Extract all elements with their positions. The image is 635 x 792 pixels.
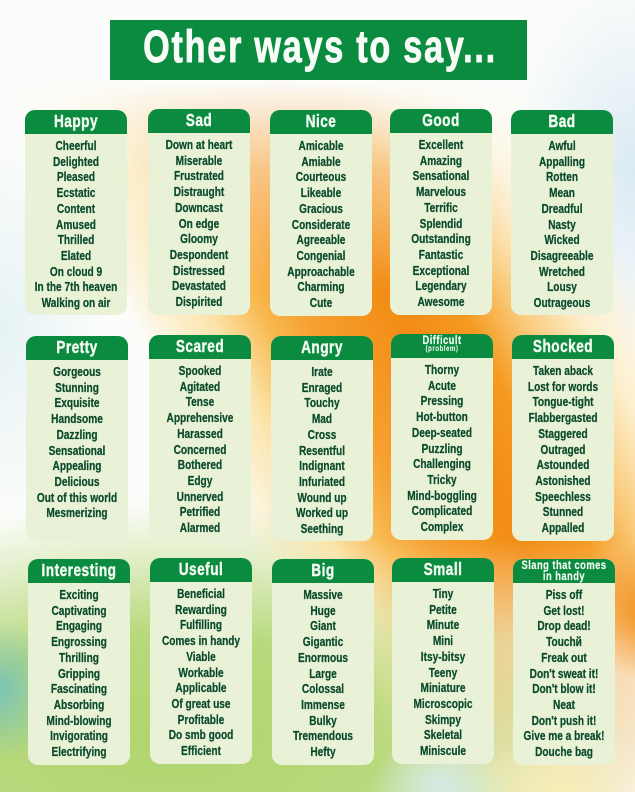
word list: Shocked: Stunned [543, 504, 583, 519]
heading: Good: Good [422, 110, 460, 130]
word list: Sad: On edge [179, 216, 219, 231]
word list: Bad: Lousy [547, 279, 577, 294]
word list: Sad: Miserable [176, 153, 222, 168]
word list: Good: Outstanding [411, 231, 471, 246]
heading: Useful [150, 558, 252, 582]
word list: Difficult: Thorny [425, 362, 459, 377]
word list: Nice: Agreeable [297, 232, 345, 247]
word list: Slang: Neat [553, 697, 575, 712]
word list: Sad: Despondent [170, 247, 228, 262]
word list: Interesting: Captivating [51, 603, 107, 618]
word list: Useful: Workable [178, 665, 224, 680]
heading: Difficult (problem): (problem) [425, 344, 458, 353]
word list: Happy: Walking on air [42, 295, 110, 310]
word list: Interesting [46, 587, 112, 759]
word list: Small: Miniature [421, 680, 465, 695]
heading: Small: Small [424, 559, 462, 579]
word list: Interesting: Thrilling [59, 650, 99, 665]
word list: Slang: Get lost! [543, 603, 585, 618]
word list: Interesting: Absorbing [54, 697, 104, 712]
panel: Slang that comes in handy [513, 559, 615, 765]
word list: Small: Tiny [433, 586, 453, 601]
heading: Nice [270, 110, 372, 134]
word list: Useful: Comes in handy [162, 633, 240, 648]
word list: Nice: Considerate [292, 217, 350, 232]
heading: Bad: Bad [548, 111, 576, 131]
heading: Angry [271, 336, 373, 360]
word list: Shocked: Staggered [538, 426, 588, 441]
word list: Interesting: Engrossing [51, 634, 107, 649]
word list: Small [413, 586, 472, 758]
word list: Difficult: Complex [421, 519, 463, 534]
heading: Difficult (problem) [391, 334, 493, 358]
word list: Scared: Harassed [177, 426, 223, 441]
word list: Good: Fantastic [419, 247, 463, 262]
word list: Nice: Charming [297, 279, 345, 294]
word list: Interesting: Exciting [59, 587, 99, 602]
panel: Difficult [391, 334, 493, 540]
word list: Pretty: Sensational [49, 443, 105, 458]
word list: Difficult: Mind-boggling [407, 488, 477, 503]
word list: Scared: Agitated [180, 379, 220, 394]
panel: Small [392, 558, 494, 764]
word list: Happy [35, 138, 117, 310]
word list: Slang: Douche bag [535, 744, 593, 759]
word list: Useful: Efficient [181, 743, 221, 758]
heading: Good [390, 109, 492, 133]
word list: Nice: Amiable [301, 154, 341, 169]
word list: Angry: Irate [311, 364, 333, 379]
word list: Bad: Wretched [539, 264, 585, 279]
word list: Pretty: Gorgeous [53, 364, 101, 379]
word list: Happy: Cheerful [55, 138, 97, 153]
word list: Useful: Rewarding [175, 602, 227, 617]
word list: Slang: Drop dead! [537, 618, 591, 633]
word list: Shocked: Taken aback [533, 363, 593, 378]
word list: Difficult: Tricky [427, 472, 457, 487]
word list: Difficult: Pressing [421, 393, 463, 408]
word list: Difficult: Complicated [412, 503, 472, 518]
word list: Big: Gigantic [303, 634, 343, 649]
word list: Small: Itsy-bitsy [421, 649, 465, 664]
word list: Sad: Frustrated [174, 168, 224, 183]
heading: Interesting: Interesting [42, 560, 116, 580]
word list: Pretty: Out of this world [37, 490, 117, 505]
word list: Slang: Don't push it! [532, 713, 596, 728]
word list: Bad: Awful [548, 138, 576, 153]
panel: Useful [150, 558, 252, 764]
word list: Nice: Gracious [299, 201, 343, 216]
panel: Good [390, 109, 492, 315]
word list: Slang [524, 587, 604, 759]
heading: Shocked: Shocked [533, 336, 593, 356]
heading: Happy: Happy [54, 111, 98, 131]
word list: Big: Massive [303, 587, 343, 602]
word list: Interesting: Engaging [56, 618, 102, 633]
word list: Bad: Appalling [539, 154, 585, 169]
word list: Pretty: Handsome [51, 411, 103, 426]
word list: Nice: Cute [310, 295, 332, 310]
word list: Good: Sensational [413, 168, 469, 183]
panel: Nice [270, 110, 372, 316]
word list: Happy: Elated [61, 248, 91, 263]
word list: Difficult [407, 362, 477, 534]
word list: Shocked [528, 363, 598, 535]
panel: Happy [25, 110, 127, 315]
heading: Interesting [28, 559, 130, 583]
word list: Pretty: Appealing [53, 458, 101, 473]
word list: Sad: Distraught [174, 184, 224, 199]
heading: Big [272, 559, 374, 583]
word list: Sad: Distressed [173, 263, 225, 278]
word list: Small: Microscopic [413, 696, 472, 711]
word list: Sad: Downcast [175, 200, 223, 215]
word list: Useful: Of great use [171, 696, 230, 711]
word list: Shocked: Lost for words [528, 379, 598, 394]
word list: Slang: Touchй [546, 634, 582, 649]
word list: Scared: Edgy [188, 473, 212, 488]
heading: Nice: Nice [306, 111, 336, 131]
word list: Interesting: Electrifying [51, 744, 107, 759]
word list: Pretty [37, 364, 117, 520]
word list: Scared: Alarmed [180, 520, 220, 535]
word list: Slang: Freak out [541, 650, 587, 665]
word list: Happy: Amused [56, 217, 96, 232]
word list: Shocked: Speechless [535, 489, 591, 504]
word list: Sad: Dispirited [176, 294, 222, 309]
panel: Shocked [512, 335, 614, 541]
word list: Good [411, 137, 471, 309]
word list: Difficult: Acute [428, 378, 456, 393]
word list: Bad: Nasty [548, 217, 576, 232]
panel: Interesting [28, 559, 130, 765]
word list: Nice: Congenial [297, 248, 345, 263]
word list: Good: Exceptional [413, 263, 469, 278]
word list: Good: Splendid [420, 216, 462, 231]
word list: Bad: Wicked [544, 232, 580, 247]
word list: Angry: Mad [312, 411, 332, 426]
word list: Angry: Enraged [302, 380, 342, 395]
word list: Useful: Profitable [178, 712, 224, 727]
word list: Happy: Content [57, 201, 95, 216]
panel: Angry [271, 336, 373, 541]
word list: Angry: Infuriated [299, 474, 345, 489]
word list: Angry: Touchy [304, 395, 340, 410]
word list: Interesting: Mind-blowing [46, 713, 112, 728]
word list: Interesting: Fascinating [51, 681, 107, 696]
word list: Sad [166, 137, 232, 309]
word list: Good: Excellent [419, 137, 463, 152]
word list: Good: Awesome [417, 294, 465, 309]
word list: Big: Giant [310, 618, 336, 633]
word list: Big: Hefty [310, 744, 336, 759]
word list: Big: Immense [301, 697, 345, 712]
word list: Angry: Resentful [299, 443, 345, 458]
heading: Bad [511, 110, 613, 134]
word list: Scared: Unnerved [177, 489, 223, 504]
heading: Scared [149, 335, 251, 359]
word list: Interesting: Invigorating [50, 728, 108, 743]
word list: Bad: Disagreeable [531, 248, 593, 263]
word list: Pretty: Stunning [55, 380, 99, 395]
word list: Shocked: Appalled [542, 520, 584, 535]
word list: Good: Legendary [415, 278, 467, 293]
word list: Small: Petite [429, 602, 457, 617]
word list: Shocked: Flabbergasted [528, 410, 598, 425]
word list: Scared [166, 363, 234, 535]
word list: Difficult: Challenging [413, 456, 471, 471]
heading: Pretty: Pretty [56, 337, 98, 357]
word list: Nice: Approachable [287, 264, 355, 279]
word list: Small: Miniscule [420, 743, 466, 758]
word list: Pretty: Dazzling [56, 427, 98, 442]
word list: Bad [531, 138, 594, 310]
word list: Useful: Viable [186, 649, 216, 664]
word list: Good: Marvelous [416, 184, 466, 199]
word list: Bad: Outrageous [534, 295, 590, 310]
panel: Scared [149, 335, 251, 541]
word list: Happy: On cloud 9 [50, 264, 102, 279]
panel: Pretty [26, 336, 128, 541]
heading: Slang that comes in handy [513, 559, 615, 583]
word list: Nice: Likeable [301, 185, 341, 200]
word list: Good: Terrific [424, 200, 458, 215]
heading: Happy [25, 110, 127, 134]
word list: Scared: Bothered [178, 457, 222, 472]
word list: Slang: Don't blow it! [532, 681, 596, 696]
word list: Big: Enormous [298, 650, 348, 665]
word list: Small: Minute [427, 617, 459, 632]
word list: Small: Teeny [429, 665, 457, 680]
heading: Sad: Sad [186, 110, 212, 130]
word list: Angry: Wound up [297, 490, 347, 505]
heading: Angry: Angry [301, 337, 343, 357]
word list: Small: Mini [433, 633, 453, 648]
heading: Slang that comes in handy: in handy [543, 569, 585, 583]
word list: Useful: Beneficial [177, 586, 225, 601]
word list: Scared: Spooked [179, 363, 221, 378]
panel: Sad [148, 109, 250, 315]
word list: Bad: Mean [549, 185, 575, 200]
word list: Scared: Tense [186, 394, 214, 409]
word list: Angry: Seething [301, 521, 343, 536]
word list: Shocked: Astounded [537, 457, 589, 472]
word list: Angry: Indignant [299, 458, 345, 473]
word list: Nice: Amicable [299, 138, 343, 153]
word list: Scared: Concerned [174, 442, 226, 457]
panel: Big [272, 559, 374, 765]
word list: Shocked: Outraged [541, 442, 585, 457]
heading: Small [392, 558, 494, 582]
word list: Small: Skimpy [425, 712, 461, 727]
word list: Nice: Courteous [296, 169, 346, 184]
word list: Bad: Rotten [546, 169, 578, 184]
word list: Big: Tremendous [293, 728, 353, 743]
word list: Useful: Applicable [175, 680, 227, 695]
word list: Slang: Piss off [546, 587, 582, 602]
word list: Sad: Devastated [172, 278, 226, 293]
word list: Sad: Down at heart [166, 137, 232, 152]
word list: Scared: Petrified [180, 504, 220, 519]
word list: Good: Amazing [420, 153, 462, 168]
word list: Small: Skeletal [424, 727, 462, 742]
word list: Useful: Do smb good [169, 727, 233, 742]
word list: Angry [296, 364, 348, 536]
word list: Pretty: Delicious [55, 474, 99, 489]
panel: Bad [511, 110, 613, 315]
heading: Useful: Useful [179, 559, 223, 579]
word list: Happy: Delighted [53, 154, 99, 169]
word list: Sad: Gloomy [180, 231, 218, 246]
word list: Happy: Ecstatic [57, 185, 95, 200]
word list: Pretty: Mesmerizing [46, 505, 108, 520]
word list: Angry: Cross [308, 427, 336, 442]
word list: Interesting: Gripping [58, 666, 100, 681]
word list: Big: Large [309, 666, 337, 681]
word list: Useful: Fulfilling [180, 617, 222, 632]
heading: Sad [148, 109, 250, 133]
word list: Big [293, 587, 353, 759]
heading: Scared: Scared [176, 336, 224, 356]
word list: Angry: Worked up [296, 505, 348, 520]
word list: Slang: Don't sweat it! [530, 666, 598, 681]
word list: Happy: Thrilled [58, 232, 94, 247]
word list: Happy: Pleased [57, 169, 95, 184]
word list: Big: Bulky [309, 713, 337, 728]
heading: Big: Big [311, 560, 335, 580]
word list: Big: Colossal [302, 681, 344, 696]
heading: Pretty [26, 336, 128, 360]
word list: Nice [287, 138, 355, 310]
word list: Happy: In the 7th heaven [35, 279, 117, 294]
title banner: Other ways to say... [143, 21, 497, 72]
word list: Pretty: Exquisite [55, 395, 99, 410]
word list: Difficult: Puzzling [421, 441, 463, 456]
word list: Shocked: Tongue-tight [532, 394, 594, 409]
heading: Shocked [512, 335, 614, 359]
word list: Shocked: Astonished [535, 473, 591, 488]
word list: Useful [162, 586, 240, 758]
word list: Difficult: Deep-seated [412, 425, 472, 440]
word list: Bad: Dreadful [541, 201, 583, 216]
word list: Slang: Give me a break! [524, 728, 604, 743]
word list: Scared: Apprehensive [167, 410, 233, 425]
word list: Big: Huge [310, 603, 336, 618]
word list: Difficult: Hot-button [416, 409, 468, 424]
